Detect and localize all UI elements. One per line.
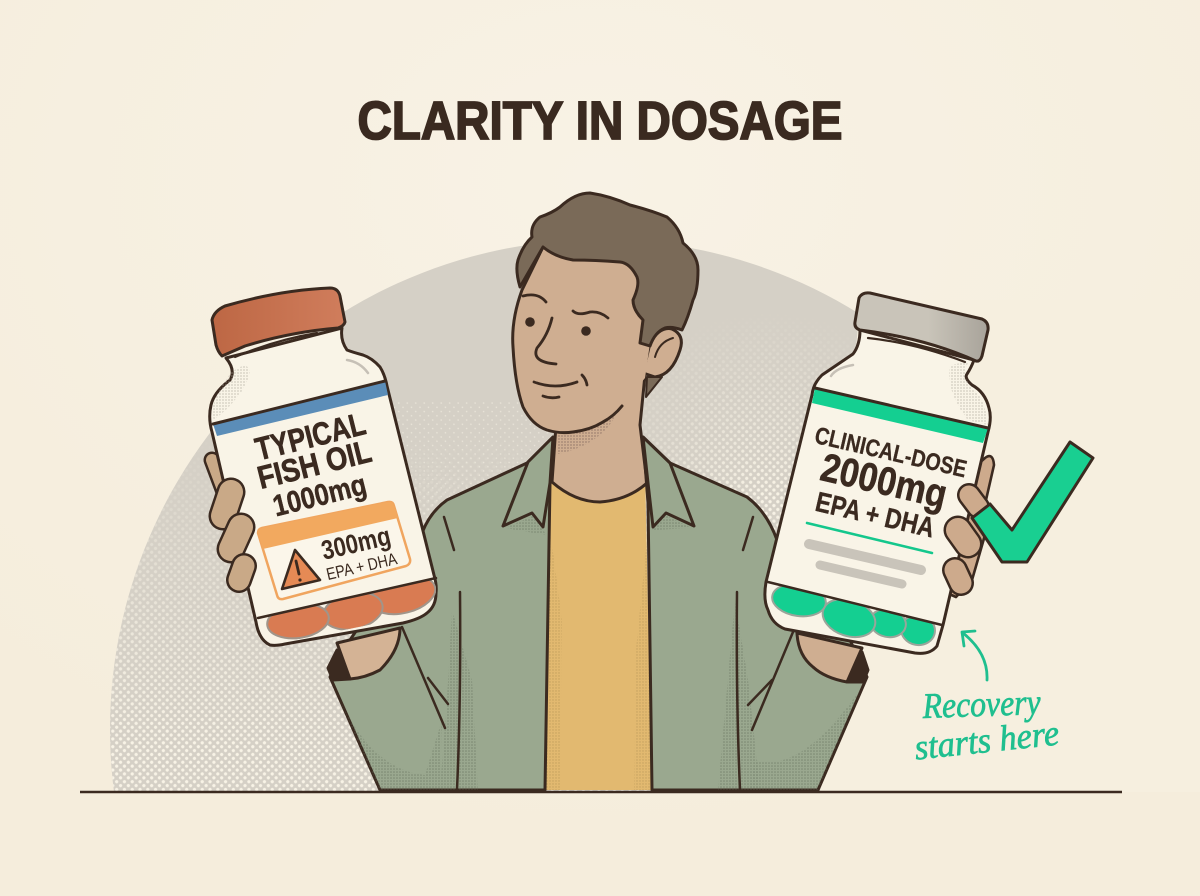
callout: recovery starts here: starts here xyxy=(913,713,1061,768)
illustration: clarity in dosage xyxy=(80,100,1122,794)
label text: EPA + DHA xyxy=(813,486,938,543)
neck highlight xyxy=(868,338,965,362)
arrow: to green pills xyxy=(962,631,987,680)
facial features xyxy=(523,295,608,398)
shoulder highlight xyxy=(831,365,853,376)
ground line xyxy=(80,791,1122,793)
label text: TYPICAL xyxy=(252,405,369,467)
warning text: 300mg xyxy=(318,521,393,566)
eyes xyxy=(525,317,591,336)
hair xyxy=(517,193,698,346)
grey cap xyxy=(855,293,988,361)
label text xyxy=(812,422,969,543)
left jacket panel xyxy=(330,437,553,790)
label text: 1000mg xyxy=(270,468,370,523)
callout: recovery starts here xyxy=(913,682,1061,768)
green rule xyxy=(807,523,932,553)
left hand back finger xyxy=(212,460,224,492)
red cap xyxy=(212,288,345,356)
face xyxy=(513,230,650,433)
hair behind ear xyxy=(646,377,662,397)
backdrop semicircle xyxy=(110,246,858,791)
bottom label edge xyxy=(768,582,942,625)
neck shadow xyxy=(557,415,616,454)
shoulder highlight xyxy=(347,360,368,373)
label text: CLINICAL-DOSE xyxy=(812,422,969,483)
pills xyxy=(266,580,436,640)
bottle shoulder shading xyxy=(949,362,988,425)
bottle body xyxy=(210,328,436,645)
grey placeholder bars xyxy=(809,544,921,584)
bottle body xyxy=(765,330,990,653)
warning box xyxy=(258,502,410,599)
warning icon xyxy=(282,550,320,589)
label text: 2000mg xyxy=(817,446,951,517)
figure: person xyxy=(328,193,868,790)
label text xyxy=(252,405,375,523)
ear xyxy=(643,329,681,377)
bottom label edge xyxy=(258,578,436,618)
shirt xyxy=(545,470,652,790)
right side cream cover xyxy=(820,300,1200,792)
right collar xyxy=(643,437,694,527)
callout: recovery starts here: Recovery xyxy=(921,682,1041,726)
neck highlight xyxy=(235,333,317,357)
green band xyxy=(812,388,988,443)
warning box: EPA + DHA xyxy=(325,549,400,584)
left collar xyxy=(503,437,553,527)
right bottle: clinical dose xyxy=(765,293,994,653)
shirt shading xyxy=(545,530,652,790)
green pills xyxy=(771,586,936,646)
blue band xyxy=(213,381,388,436)
jacket seams xyxy=(402,517,793,790)
neck xyxy=(552,375,647,502)
left bottle: typical fish oil xyxy=(210,288,439,645)
label text: FISH OIL xyxy=(254,433,375,496)
right jacket panel xyxy=(643,437,867,790)
ear detail xyxy=(655,338,673,357)
jacket shading xyxy=(335,515,860,790)
left hand fingers xyxy=(223,492,244,580)
right hand fingers xyxy=(955,495,978,583)
bottle shoulder shading xyxy=(213,366,250,420)
right hand palm xyxy=(940,456,994,597)
checkmark xyxy=(972,442,1093,562)
title: CLARITY IN DOSAGE xyxy=(358,91,842,151)
left cuff and wrist xyxy=(328,650,350,680)
right cuff and wrist xyxy=(848,652,868,682)
